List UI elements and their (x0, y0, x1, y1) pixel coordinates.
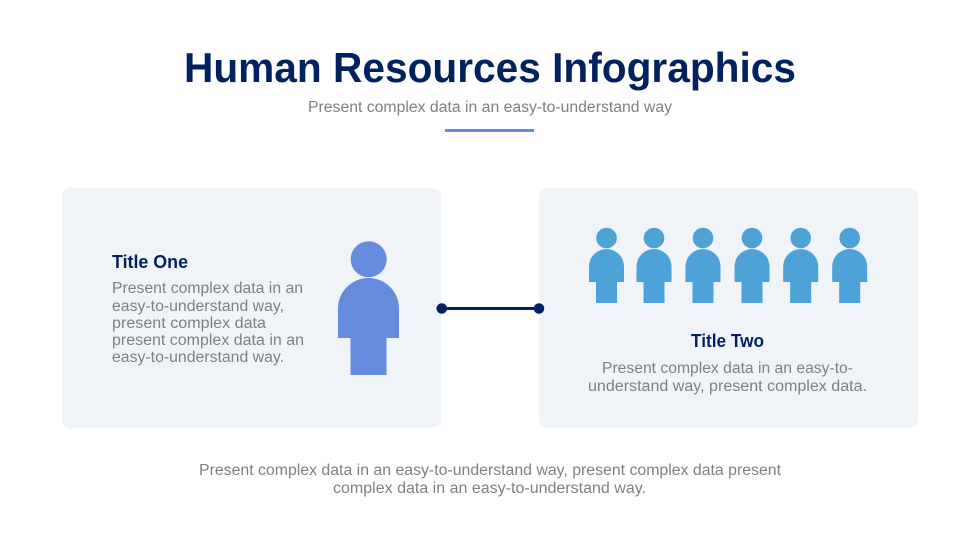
icon: row of six people (589, 228, 867, 303)
footer text: complex data in an easy-to-understand way. (333, 480, 646, 497)
subtitle: Present complex data in an easy-to-understand way (308, 99, 672, 116)
title underline (445, 129, 534, 132)
text block: title one (112, 280, 304, 366)
heading: title one: Title One (112, 251, 188, 272)
heading: title two: Title Two (691, 330, 764, 351)
text block: title one: present complex data in an (112, 332, 304, 349)
text block: title two (588, 360, 867, 395)
footer text (199, 462, 782, 497)
footer text: Present complex data in an easy-to-understand way, present complex data present (199, 462, 782, 479)
text block: title one: present complex data (112, 315, 266, 332)
text block: title one: easy-to-understand way, (112, 298, 284, 315)
text block: title two: understand way, present complex data. (588, 378, 867, 395)
icon: large person (338, 241, 399, 375)
title: Human Resources Infographics (184, 44, 796, 91)
panel: title one (62, 188, 441, 428)
text block: title one: Present complex data in an (112, 280, 303, 297)
text block: title one: easy-to-understand way. (112, 349, 284, 366)
panel: title two (539, 188, 918, 428)
connector arrow between panels (436, 303, 544, 314)
text block: title two: Present complex data in an easy-to- (602, 360, 853, 377)
